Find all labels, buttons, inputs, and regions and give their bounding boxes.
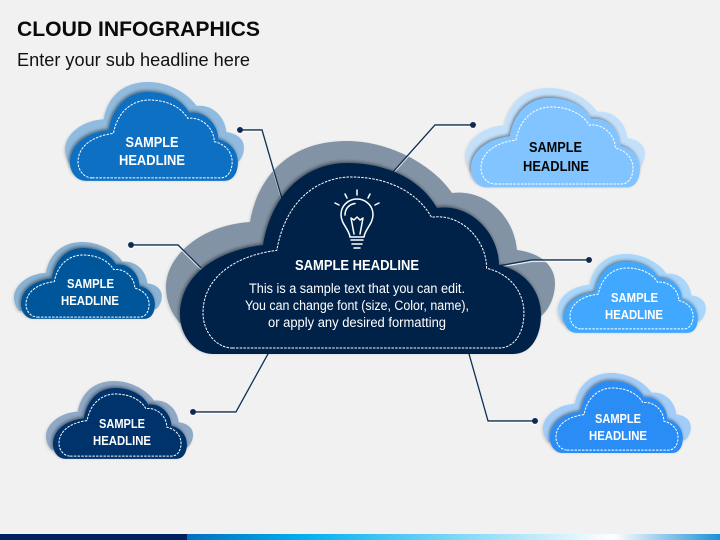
cloud label [523,140,589,175]
cloud label: HEADLINE [589,428,647,443]
subtitle: Enter your sub headline here [17,50,250,70]
cloud label: SAMPLE [529,140,582,156]
icon: light bulb [335,190,379,248]
connector: top-right cloud [393,122,476,172]
main headline: SAMPLE HEADLINE [295,258,419,274]
cloud label [605,290,663,322]
cloud label: HEADLINE [605,307,663,322]
cloud label: SAMPLE [126,135,179,151]
cloud label: HEADLINE [119,153,185,169]
cloud label: HEADLINE [523,159,589,175]
cloud label: SAMPLE [595,411,641,426]
panel: middle-right cloud [558,254,706,333]
connector: bottom-right cloud [469,354,538,424]
body text [245,281,469,330]
connector: middle-left cloud [128,242,201,268]
cloud label: SAMPLE [99,416,145,431]
connector: top-left cloud [237,127,282,199]
panel: bottom-left cloud [46,381,193,459]
title: CLOUD INFOGRAPHICS [17,18,260,41]
cloud label: SAMPLE [611,290,658,305]
cloud label [119,135,185,169]
connector: middle-right cloud [498,257,592,266]
cloud label: SAMPLE [67,276,114,291]
cloud label: HEADLINE [61,293,119,308]
panel: bottom-right cloud [543,373,691,453]
cloud label: HEADLINE [93,433,151,448]
panel: top-left cloud [65,82,244,181]
cloud label [93,416,151,448]
body text: You can change font (size, Color, name), [245,298,469,313]
cloud label [589,411,647,443]
body text: or apply any desired formatting [268,315,446,330]
body text: This is a sample text that you can edit. [249,281,465,296]
cloud label [61,276,119,308]
main cloud back layer [166,141,555,323]
footer bar [0,534,720,540]
connector: bottom-left cloud [190,354,268,415]
panel: central cloud [180,163,541,354]
panel: middle-left cloud [14,242,162,319]
panel: top-right cloud [466,88,645,187]
